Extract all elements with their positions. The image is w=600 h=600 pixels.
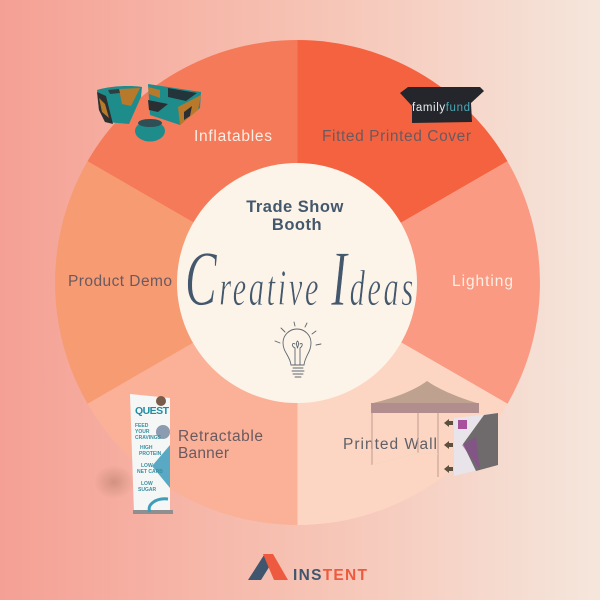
segment: product demo xyxy=(55,161,298,404)
image: retractable banner: FEED xyxy=(135,423,149,429)
segment: lighting xyxy=(298,161,540,404)
label: retractable banner: Banner xyxy=(178,445,229,462)
segment: inflatables xyxy=(88,40,298,282)
script title: creative ideas: Creative Ideas xyxy=(185,236,416,323)
image: retractable banner: NET CARB xyxy=(137,469,163,475)
image: printed wall tent xyxy=(371,381,498,477)
heading: trade show booth: Booth xyxy=(272,216,322,234)
image: retractable banner: CRAVINGS xyxy=(135,435,162,441)
logo wordmark: INSTENT xyxy=(293,567,368,584)
image: retractable banner: SUGAR xyxy=(138,487,156,493)
heading: trade show booth: Trade Show xyxy=(246,198,344,216)
label: lighting: Lighting xyxy=(452,273,513,290)
right chair xyxy=(148,84,201,125)
icon: light bulb xyxy=(275,322,321,377)
image: fitted table cover xyxy=(400,87,484,123)
image: retractable banner: QUEST xyxy=(135,405,170,417)
logo mark xyxy=(248,554,288,580)
image: inflatable furniture xyxy=(97,84,201,142)
image: retractable banner: HIGH xyxy=(140,445,153,451)
image: retractable banner: LOW xyxy=(141,463,153,469)
label: printed wall: Printed Wall xyxy=(343,436,437,453)
left chair xyxy=(97,86,142,124)
label: retractable banner: Retractable xyxy=(178,428,263,445)
image: retractable banner: LOW xyxy=(141,481,153,487)
label: product demo: Product Demo xyxy=(68,273,172,290)
image: retractable banner xyxy=(94,394,173,514)
image: fitted table cover: familyfund xyxy=(412,102,470,114)
segment: fitted printed cover xyxy=(298,40,508,282)
logo: instent xyxy=(248,554,368,584)
segment: printed wall xyxy=(298,282,508,525)
segment: retractable banner xyxy=(88,282,298,525)
label: inflatables: Inflatables xyxy=(194,128,272,145)
wheel chart xyxy=(55,40,540,525)
pouf xyxy=(135,120,165,142)
label: fitted printed cover: Fitted Printed Cover xyxy=(322,128,471,145)
image: retractable banner: YOUR xyxy=(135,429,150,435)
center circle xyxy=(177,163,417,403)
heading: trade show booth xyxy=(246,198,344,234)
image: retractable banner: PROTEIN xyxy=(139,451,162,457)
label: retractable banner xyxy=(178,428,263,462)
